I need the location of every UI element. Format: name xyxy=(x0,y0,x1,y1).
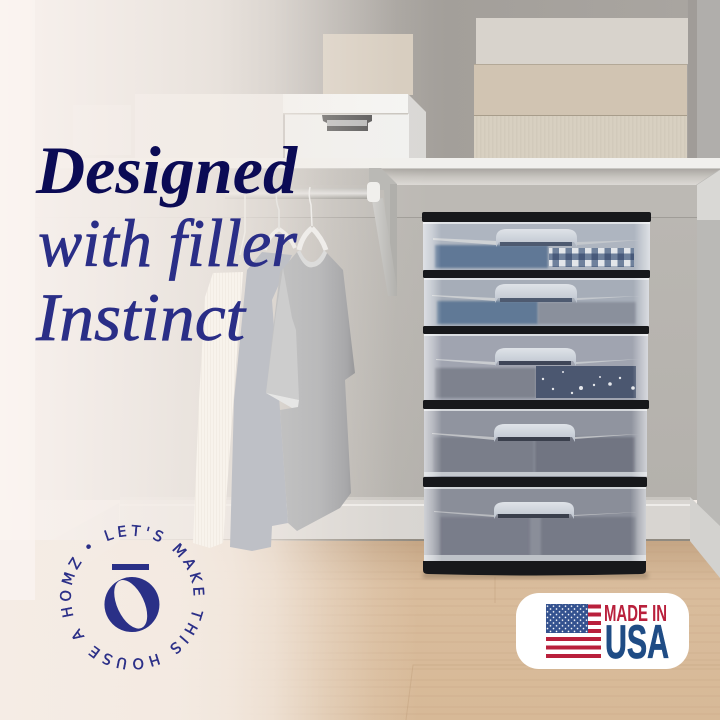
badge text: MADE IN xyxy=(604,600,667,626)
baseboard xyxy=(0,497,720,600)
shelf bracket xyxy=(367,168,397,296)
garment: grey t-shirt xyxy=(266,250,355,531)
hanging clothes xyxy=(193,187,355,551)
garment: blue-grey shirt xyxy=(230,190,295,551)
icon: american flag xyxy=(546,604,601,658)
hanger xyxy=(299,187,326,250)
headline line 3: Instinct xyxy=(35,279,247,355)
left pale strip xyxy=(0,0,35,600)
circular brand stamp xyxy=(60,524,204,670)
left cream fade: floor xyxy=(0,540,720,720)
box: white with handle xyxy=(283,94,426,158)
storage boxes xyxy=(283,18,688,158)
headline line 2: with filler xyxy=(38,205,298,281)
headline line 1: Designed xyxy=(35,132,298,208)
made in USA badge xyxy=(516,593,689,669)
faint boxes on shelf left xyxy=(73,94,283,158)
garment: cream ribbed sweater xyxy=(193,195,245,548)
clothes rod xyxy=(225,188,370,199)
left cream fade: wall xyxy=(0,0,720,540)
drawer 2 xyxy=(424,278,649,326)
headline xyxy=(35,132,298,355)
badge text: USA xyxy=(605,615,669,668)
stamp text ring: • LET'S MAKE THIS HOUSE A HOMZ xyxy=(60,524,204,670)
box: kraft upright xyxy=(323,34,413,95)
drawer 1 xyxy=(423,222,650,270)
drawer 5 xyxy=(424,487,646,561)
black frame rails xyxy=(422,212,651,576)
room background xyxy=(0,0,720,570)
drawer 3 xyxy=(424,334,648,400)
shelf xyxy=(60,158,720,220)
stamp logo: macron o xyxy=(104,564,159,632)
drawer 4 xyxy=(424,409,647,477)
plastic five-drawer tower xyxy=(422,212,651,576)
box stack xyxy=(474,18,688,158)
floor xyxy=(0,540,720,720)
